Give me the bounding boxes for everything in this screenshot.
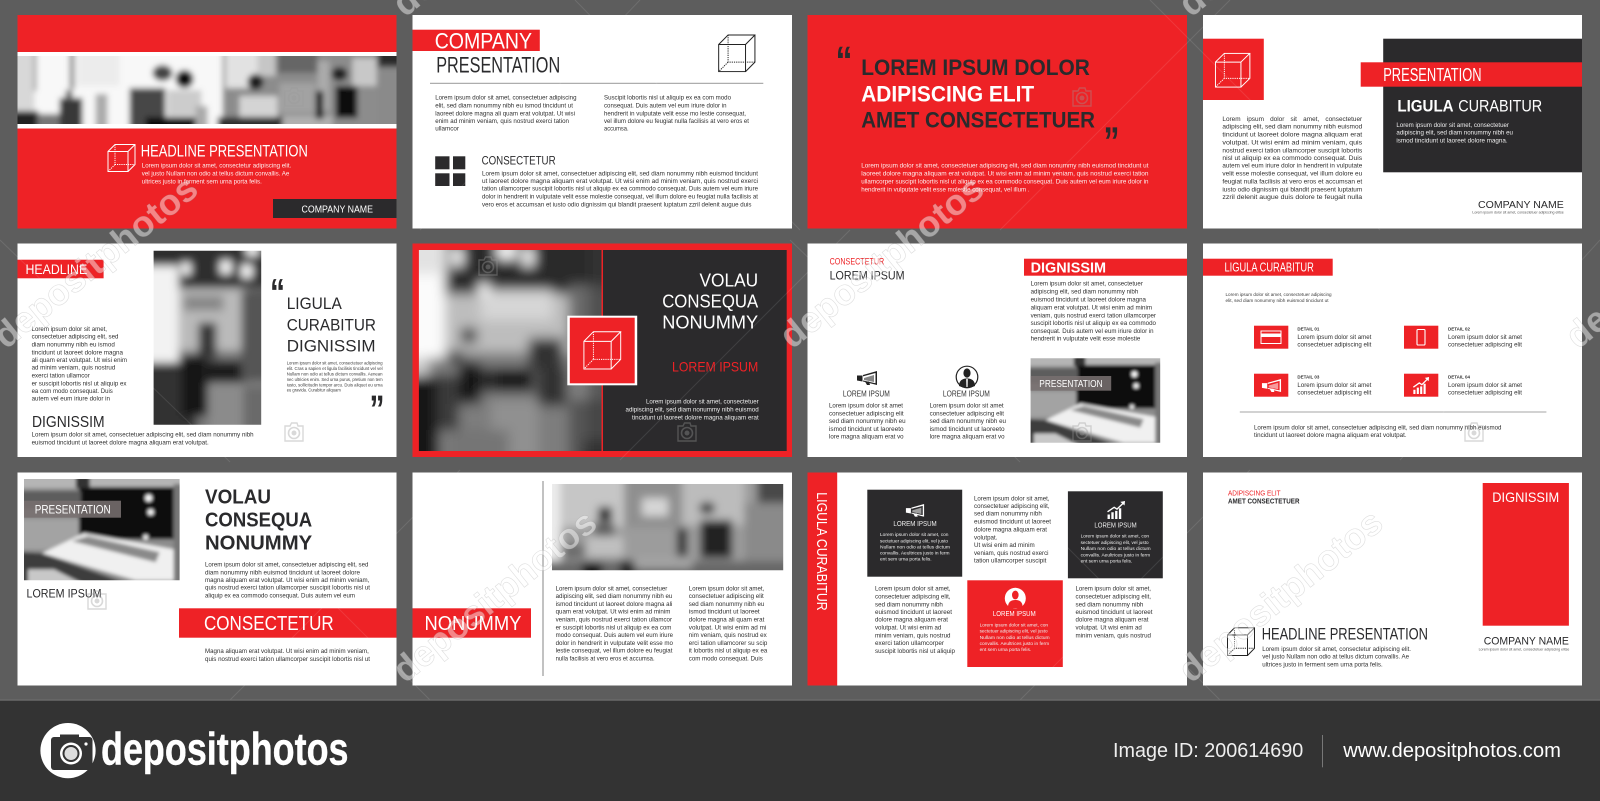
text block bottom: tation ullamcorper suscipit lobortis nisl ut aliquip ex ea commodo consequat. Duis autem vel eum iriure [482, 186, 758, 193]
text block left [435, 95, 577, 133]
heading pair [830, 257, 905, 283]
red heading bar [179, 608, 396, 638]
text block left: autem vel eum iriure dolor in hendrerit in vulputate [1222, 163, 1363, 170]
text block bottom: vero eros et accumsan et iusto odio dignissim qui blandit praesent luptatum zzril delenit augue duis [482, 201, 752, 208]
text block bottom [205, 648, 370, 663]
heading: HEADLINE PRESENTATION [141, 142, 308, 161]
text block [1031, 281, 1157, 343]
red card: convallis. Aeultrices justo in ferm [980, 641, 1049, 647]
feature column 2: consectetuer adipiscing elit [930, 410, 1004, 417]
text block: magna aliquam erat volutpat. Ut wisi enim ad minim veniam, [205, 577, 370, 584]
text block left: adipiscing elit, sed diam nonummy nibh euismod [1222, 124, 1363, 131]
dark block [1383, 39, 1582, 172]
heading: NONUMMY [205, 532, 313, 554]
red banner [1361, 62, 1582, 87]
quote heading: LIGULA [287, 294, 342, 313]
detail 02: Lorem ipsum dolor sit amet [1448, 334, 1522, 341]
text block middle: consectetuer adipiscing elit, [974, 503, 1050, 510]
text block left: ullamcor [435, 126, 460, 133]
panel: slide 12 closing [1203, 472, 1582, 686]
red heading bar: LIGULA CURABITUR [1224, 261, 1314, 275]
text column 2: Lorem ipsum dolor sit amet, [689, 585, 764, 592]
red cube tile [567, 316, 637, 385]
text block bottom [482, 170, 759, 208]
detail 03: Lorem ipsum dolor sit amet [1297, 382, 1372, 389]
photo: bath with label: PRESENTATION [35, 503, 111, 517]
detail 01 [1254, 326, 1372, 349]
red card: Lorem ipsum dolor sit amet, con [980, 622, 1048, 628]
text column 1 [556, 585, 673, 663]
red heading bar [412, 608, 531, 638]
red heading bar: CONSECTETUR [204, 613, 334, 635]
text column 1: ismod tincidunt ut laoreet dolore magna ali [556, 601, 673, 608]
text column 1: er suscipit lobortis nisl ut aliquip ex ea com [556, 624, 672, 631]
text column 2: erci tation ullamcorer su scip [689, 640, 768, 647]
small intro text [1226, 292, 1332, 303]
text block left: feugiat nulla facilisis at vero eros et accumsan et [1222, 178, 1362, 185]
quote line 3: AMET CONSECTETUER [861, 107, 1095, 132]
text block on dark: adipiscing elit, sed diam nonummy nibh eu [1396, 130, 1513, 137]
open quote mark: “ [270, 272, 285, 314]
feature column 1: ismod tincidunt ut laoreeto [829, 426, 904, 433]
text block middle: dolore magna aliquam erat [974, 526, 1047, 533]
text block bottom: tincidunt ut laoreet dolore magna aliquam erat volutpat. [1254, 432, 1407, 439]
dark panel [603, 250, 787, 451]
text block right: Suscipit lobortis nisl ut aliquip ex ea com modo [604, 95, 731, 102]
feature column 1: LOREM IPSUM [843, 390, 890, 399]
text block: ultrices justo in ferment sem urna porta felis. [142, 178, 262, 185]
heading: ligula curabitur: CURABITUR [1458, 97, 1542, 116]
text block: vel justo Nullam non odio at tellus dictum convallis. Ae [142, 171, 290, 178]
panel: slide 4 presentation [1203, 15, 1582, 228]
heading pair: CONSECTETUR [830, 257, 885, 267]
company name: Lorem ipsum dolor sit amet, consectetuer adipiscing elitse [1479, 647, 1569, 651]
quote heading: DIGNISSIM [287, 337, 376, 356]
text block lower left: consectetuer adipiscing elit, [875, 593, 951, 600]
text column 2: dolore magna ali quam erat [689, 617, 764, 624]
text block: laoreet dolore magna aliquam erat volutpat. Ut wisi enim ad minim veniam, quis nostrud exerci tation [861, 171, 1149, 178]
panel: slide 7 dignissim [808, 244, 1187, 467]
red card [967, 580, 1063, 667]
detail 01: Lorem ipsum dolor sit amet [1297, 334, 1372, 341]
text column 2: consectetuer adipiscing elit [689, 593, 764, 600]
feature column 1: consectetuer adipiscing elit [829, 410, 904, 417]
icon: four squares [435, 156, 465, 186]
text block bottom [1254, 424, 1502, 439]
red sub-heading: LOREM IPSUM [672, 358, 758, 374]
text column 1: Lorem ipsum dolor sit amet, consectetuer [556, 585, 668, 592]
text column 2: com modo consequat. Duis [689, 656, 763, 663]
feature column 2 [930, 390, 1006, 441]
panel: slide 11 cards [808, 472, 1187, 686]
logo: camera badge [40, 723, 96, 778]
red card: Nullam non odio at tellus dictum [980, 635, 1050, 641]
panel: slide 8 details [1203, 244, 1582, 457]
text block right [604, 95, 749, 133]
text block on dark: ismod tincidunt ut laoreet dolore magna. [1396, 138, 1508, 145]
text block left: zzril delenit augue duis dolore te feugait nulla [1222, 194, 1363, 201]
panel: slide 6 framed photo [374, 205, 792, 506]
text block middle: volutpat. [974, 534, 998, 541]
company name tag [273, 199, 396, 218]
text column 2: nim veniam, quis nostrud ex [689, 632, 767, 639]
heading: VOLAU [700, 270, 758, 291]
text block middle [974, 495, 1051, 565]
text block lower left: euismod tincidunt ut laoreet [875, 609, 952, 616]
photo: blurred office [552, 484, 784, 570]
detail 01: consectetuer adipiscing elit [1297, 342, 1372, 349]
text block lower left: sed diam nonummy nibh [875, 601, 943, 608]
text block: suscipit lobortis nisl ut aliquip ex ea commodo [1031, 320, 1156, 327]
text block: quis nostrud exerci tation ullamcorper suscipit lobortis nisl ut [205, 585, 370, 592]
feature column 2: Lorem ipsum dolor sit amet [930, 403, 1004, 410]
red block: DIGNISSIM [1492, 489, 1559, 505]
text block left: diam nonummy nibh eu ismod [32, 342, 115, 349]
text block: tincidunt ut laoreet dolore magna aliquam erat [632, 414, 759, 421]
text block: aliquam erat volutpat. Ut wisi enim ad minim [1031, 304, 1152, 311]
text column 2: ismod tincidunt ut laoreet [689, 609, 760, 616]
website url: www.depositphotos.com [1342, 740, 1561, 762]
detail 04 [1404, 374, 1522, 397]
detail 02 [1404, 326, 1522, 349]
photo: bath with label [1014, 342, 1180, 467]
heading [205, 486, 313, 554]
text block right: accumsa. [604, 126, 629, 133]
text block lower left: Lorem ipsum dolor sit amet, [875, 586, 951, 593]
detail 03: DETAIL 03 [1297, 374, 1320, 379]
text column 2 [689, 585, 768, 663]
text block: hendrerit in vulputate velit esse molestie [1031, 336, 1141, 343]
feature column 1: Lorem ipsum dolor sit amet [829, 403, 903, 410]
red heading bar [1024, 259, 1187, 276]
text block: Lorem ipsum dolor sit amet, consectetuer [646, 399, 759, 406]
small quote text: Nullam non odio at tellus dictum convallis. Aenean [287, 372, 383, 377]
vertical heading: LIGULA CURABITUR [813, 492, 829, 611]
text block right: consequat. Duis autem vel eum iriure dolor in [604, 102, 727, 109]
close quote mark: ” [1104, 120, 1120, 164]
text block left: elit, sed diam nonummy nibh eu ismod tincidunt ut [435, 102, 573, 109]
text block right: hendrerit in vulputate velit esse mo lestie consequat, [604, 110, 746, 117]
small quote text: Lorem ipsum dolor sit amet, consectetuer adipiscing [287, 361, 383, 366]
text block: hendrerit in vulputate velit esse molestie consequat, vel illum . [861, 186, 1030, 193]
quote line 2: ADIPISCING ELIT [861, 81, 1035, 106]
text block lower right: volutpat. Ut wisi enim ad [1076, 625, 1142, 632]
panel: slide 5 headline and quote [18, 216, 396, 466]
top labels: AMET CONSECTETUER [1228, 497, 1300, 506]
heading pair: LOREM IPSUM [830, 269, 905, 283]
dark card 1: Nullam non odio at tellus dictum [880, 544, 950, 550]
text block middle: sed diam nonummy nibh [974, 511, 1042, 518]
text column 1: veniam, quis nostrud exerci tation ullamcor [556, 617, 673, 624]
text block middle: tation ullamcorper suscipit [974, 558, 1047, 565]
text column 2: sed diam nonummy nibh eu [689, 601, 765, 608]
detail 01: DETAIL 01 [1297, 327, 1320, 332]
dark card 2: sectetuer adipiscing elit, vel justo [1081, 540, 1149, 546]
heading: ligula curabitur: LIGULA [1397, 97, 1454, 116]
text block bottom: ut laoreet dolore magna aliquam erat volutpat. Ut wisi enim ad minim veniam, quis nostrud exerci [482, 178, 759, 185]
icon: black cube [1228, 628, 1254, 655]
feature column 2: sed diam nonummy nibh eu [930, 418, 1006, 425]
photo: blurred lobby [418, 250, 602, 451]
top labels [1228, 489, 1300, 506]
icon: megaphone [857, 371, 877, 385]
caption: LOREM IPSUM [26, 586, 102, 600]
quote heading: CURABITUR [287, 315, 376, 334]
text block lower left: volutpat. Ut wisi enim ad [875, 625, 942, 632]
small intro text: elit, sed diam nonummy nibh euismod tincidunt ut [1226, 298, 1329, 303]
text block: ullamcorper suscipit lobortis nisl ut aliquip ex ea commodo consequat. Duis autem vel eum iriure dolor in [861, 178, 1149, 185]
text block lower left: suscipit lobortis nisl ut aliquip [875, 648, 955, 655]
text block bottom: quis nostrud exerci tation ullamcorper suscipit lobortis nisl ut [205, 656, 370, 663]
heading: VOLAU [205, 486, 271, 508]
watermark overlay: depositphotos [771, 167, 991, 356]
photo: lobby portrait [154, 250, 262, 425]
text block lower left: minim veniam, quis nostrud [875, 632, 951, 639]
company name: Lorem ipsum dolor sit amet, consectetuer adipiscing elitse [1472, 211, 1564, 215]
watermark overlay: depositphotos [384, 501, 604, 690]
small quote text: eu gravida. Curabitur aliquam [287, 387, 341, 392]
text block lower left: exerci tation ullamcorper [875, 640, 945, 647]
icon: person [956, 366, 978, 388]
company name: COMPANY NAME [1478, 199, 1564, 211]
heading: CONSEQUA [662, 291, 759, 312]
detail 04: consectetuer adipiscing elit [1448, 390, 1522, 397]
red heading bar [1203, 259, 1333, 276]
text block bottom: dolor in hendrerit in vulputate velit esse molestie consequat, vel illum dolore eu feugiat nulla facilisis at [482, 194, 758, 201]
text block lower right: euismod tincidunt ut laoreet [1076, 609, 1153, 616]
red headline tag: HEADLINE [26, 261, 87, 277]
detail 04: DETAIL 04 [1448, 374, 1470, 379]
text block left [1222, 116, 1363, 201]
text block bottom: Lorem ipsum dolor sit amet, consectetuer adipiscing elit, sed diam nonummy nibh [32, 431, 254, 438]
text block: adipiscing elit, sed diam nonummy nibh euismod [626, 407, 759, 414]
heading: presentation: PRESENTATION [436, 53, 560, 78]
text block [205, 561, 370, 599]
dark card 2: convallis. Aeultrices justo in ferm [1081, 552, 1150, 558]
text block: Lorem ipsum dolor sit amet, consectetur adipiscing elit. [142, 163, 291, 170]
red card: LOREM IPSUM [993, 609, 1036, 618]
quote line 1: LOREM IPSUM DOLOR [861, 55, 1090, 80]
logo: wordmark: depositphotos [101, 723, 348, 774]
heading: ligula curabitur [1397, 97, 1542, 116]
image id: Image ID: 200614690 [1113, 740, 1303, 762]
feature column 1: sed diam nonummy nibh eu [829, 418, 906, 425]
text column 1: adipiscing elit, sed diam nonummy nibh eu [556, 593, 673, 600]
photo: bath with label [4, 459, 204, 609]
sub-heading: CONSECTETUR [482, 154, 556, 168]
red card: ent sem urna porta felis. [980, 647, 1031, 653]
small quote text [287, 361, 383, 392]
text block: ultrices justo in ferment sem urna porta felis. [1262, 661, 1383, 668]
text column 1: quam erat volutpat. Ut wisi enim ad minim [556, 609, 671, 616]
dark card 2 [1068, 491, 1163, 578]
text block bottom [32, 431, 254, 446]
text block: Lorem ipsum dolor sit amet, consectetuer adipiscing elit, sed [205, 561, 369, 568]
dark card 2: Lorem ipsum dolor sit amet, con [1081, 534, 1149, 540]
detail 03 [1254, 374, 1372, 397]
text block left: consectetuer adipiscing elit, sed [32, 334, 119, 341]
dark card 2: ent sem urna porta felis. [1081, 558, 1132, 564]
text block bottom: Magna aliquam erat volutpat. Ut wisi enim ad minim veniam, [205, 648, 369, 655]
panel: slide 9 volau [4, 459, 397, 686]
text block lower right: sed diam nonummy nibh [1076, 601, 1144, 608]
dark card 1 [867, 490, 962, 577]
red headline tag [18, 260, 104, 278]
red heading bar: DIGNISSIM [1031, 259, 1106, 276]
watermark overlay: depositphotos [1170, 501, 1390, 690]
text block left: tincidunt ut laoreet dolore magna [32, 349, 123, 356]
text block left: laoreet dolore magna ali quam erat volutpat. Ut wisi [435, 110, 575, 117]
text block lower right [1076, 586, 1153, 639]
text block lower left: dolore magna aliquam erat [875, 617, 948, 624]
panel: slide 1 headline cover [0, 15, 432, 228]
text column 1: dolor in hendrerit in vulputate velit esse mo [556, 640, 673, 647]
heading: HEADLINE PRESENTATION [1262, 625, 1428, 644]
text block left: ali quam erat volutpat. Ut wisi enim [32, 357, 127, 364]
text block: consequat. Duis autem vel eum iriure dolor in [1031, 328, 1154, 335]
dark card 1: sectetuer adipiscing elit, vel justo [880, 538, 948, 544]
text block left: iusto odio dignissim qui blandit praesent luptatum [1222, 186, 1363, 193]
text block middle: veniam, quis nostrud exerci [974, 550, 1049, 557]
photo: bath with label: PRESENTATION [1039, 378, 1103, 390]
text block [1262, 646, 1411, 668]
text block [142, 163, 291, 185]
feature column 2: LOREM IPSUM [943, 390, 990, 399]
close quote mark: ” [370, 389, 384, 431]
text column 1: modo consequat. Duis autem vel eum iriure [556, 632, 673, 639]
text block bottom: euismod tincidunt ut laoreet dolore magna aliquam erat volutpat. [32, 439, 209, 446]
panel: slide 10 nonummy [412, 454, 822, 686]
panel: slide 3 quote [808, 15, 1187, 228]
text column 2: volutpat. Ut wisi enim ad mi [689, 624, 767, 631]
text block left: nostrud exerci tation ullamcorper suscipit lobortis [1222, 147, 1363, 154]
text block middle: Ut wisi enim ad minim [974, 542, 1035, 549]
detail 04: Lorem ipsum dolor sit amet [1448, 382, 1522, 389]
text column 1: lestie consequat, vel illum dolore eu feugiat [556, 648, 673, 655]
photo: office people [18, 56, 396, 124]
dark card 1: convallis. Aeultrices justo in ferm [880, 551, 950, 557]
dark card 2: Nullam non odio at tellus dictum [1081, 546, 1151, 552]
red heading bar: NONUMMY [424, 613, 521, 635]
text block left: ea com modo consequat. Duis [32, 388, 113, 395]
text block bottom: Lorem ipsum dolor sit amet, consectetuer adipiscing elit, sed diam nonummy nibh euismod tincidunt [482, 170, 758, 177]
text block left: er suscipit lobortis nisl ut aliquip ex [32, 380, 127, 387]
company name tag: COMPANY NAME [302, 204, 373, 215]
icon: black cube [719, 35, 755, 72]
text block lower right: dolore magna aliquam erat [1076, 617, 1149, 624]
dark card 1: LOREM IPSUM [893, 519, 937, 528]
text block left: nisl ut aliquip ex ea commodo consequat. Duis [1222, 155, 1363, 162]
text block: Lorem ipsum dolor sit amet, consectetur adipiscing elit. [1262, 646, 1411, 653]
sub-heading: DIGNISSIM [32, 414, 105, 431]
text block: veniam, quis nostrud exerci tation ullamcorper [1031, 312, 1157, 319]
text block right: vel illum dolore eu feugiat nulla facilisis at vero eros et [604, 118, 749, 125]
text block [626, 399, 759, 421]
text block [861, 163, 1149, 193]
panel: slide 2 company presentation [412, 15, 792, 228]
text block: vel justo Nullam non odio at tellus dictum convallis. Ae [1262, 654, 1409, 661]
quote heading [287, 294, 376, 356]
detail 02: DETAIL 02 [1448, 327, 1470, 332]
heading: CONSEQUA [205, 509, 312, 531]
text block left: Lorem ipsum dolor sit amet, consectetuer adipiscing [435, 95, 577, 102]
heading: NONUMMY [662, 312, 758, 333]
icon: white cube [108, 144, 135, 172]
text block lower right: Lorem ipsum dolor sit amet, [1076, 586, 1151, 593]
open quote mark: “ [836, 39, 852, 83]
detail 03: consectetuer adipiscing elit [1297, 390, 1372, 397]
heading [662, 270, 759, 333]
text block left: enim ad minim veniam, quis nostrud exerci tation [435, 118, 569, 125]
text block: aliquip ex ea commodo consequat. Duis autem vel eum [205, 592, 355, 599]
red icon block [1203, 39, 1264, 100]
heading: company: COMPANY [435, 28, 532, 53]
dark card 1: ent sem urna porta felis. [880, 557, 932, 563]
text column 2: it lobortis nisl ut aliquip ex ea [689, 648, 768, 655]
text block left: autem vel eum iriure dolor in [32, 396, 110, 403]
feature column 2: ismod tincidunt ut laoreeto [930, 426, 1005, 433]
red banner: PRESENTATION [1383, 65, 1482, 85]
small intro text: Lorem ipsum dolor sit amet, consectetuer adipiscing [1226, 292, 1332, 297]
text block left: Lorem ipsum dolor sit amet, consectetuer [1222, 116, 1363, 123]
feature column 2: lore magna aliquam erat vo [930, 434, 1005, 441]
company name: COMPANY NAME [1484, 636, 1569, 648]
red card: sectetuer adipiscing elit, vel justo [980, 629, 1048, 635]
text block: adipiscing elit, sed diam nonummy nibh [1031, 289, 1139, 296]
dark card 2: LOREM IPSUM [1094, 521, 1137, 530]
dark card 1: Lorem ipsum dolor sit amet, con [880, 532, 949, 538]
small quote text: elit. Cras a sapien et ligula facilisis tincidunt vel vel [287, 366, 383, 371]
small quote text: iusto, sollicitudin tempor arcu. Duis aliquet eu urna [287, 382, 383, 387]
feature column 1: lore magna aliquam erat vo [829, 434, 904, 441]
detail 02: consectetuer adipiscing elit [1448, 342, 1522, 349]
small quote text: nec ultricies enim. Sed urna purus, pretium non tem [287, 377, 383, 382]
feature column 1 [829, 390, 906, 441]
text block lower right: minim veniam, quis nostrud [1076, 632, 1151, 639]
text block lower right: consectetuer adipiscing elit, [1076, 593, 1151, 600]
footer band [0, 700, 1600, 801]
text block left: tincidunt ut laoreet dolore magna aliquam erat [1222, 132, 1362, 139]
text block middle: euismod tincidunt ut laoreet [974, 519, 1051, 526]
text block left: ad minim veniam, quis nostrud [32, 365, 116, 372]
text block: Lorem ipsum dolor sit amet, consectetuer adipiscing elit, sed diam nonummy nibh euismod tincidunt ut [861, 163, 1149, 170]
text block on dark: Lorem ipsum dolor sit amet, consectetuer [1396, 122, 1510, 129]
text block lower left [875, 586, 955, 655]
text block bottom: Lorem ipsum dolor sit amet, consectetuer adipiscing elit, sed diam nonummy nibh euismod [1254, 424, 1502, 431]
top labels: ADIPISCING ELIT [1228, 489, 1281, 498]
text block: diam nonummy nibh euismod tincidunt ut laoreet dolore [205, 569, 360, 576]
text block on dark [1396, 122, 1513, 145]
text block middle: Lorem ipsum dolor sit amet, [974, 495, 1050, 502]
text block left: volutpat. Ut wisi enim ad minim veniam, quis [1222, 139, 1363, 146]
text column 1: nulla facilisis at vero eros et accumsa. [556, 656, 655, 663]
text block: Lorem ipsum dolor sit amet, consectetuer [1031, 281, 1144, 288]
text block: euismod tincidunt ut laoreet dolore magna [1031, 297, 1146, 304]
text block left: velit esse molestie consequat, vel illum dolore eu [1222, 171, 1363, 178]
text block left: Lorem ipsum dolor sit amet, [32, 326, 107, 333]
text block left [32, 326, 127, 403]
red block [1483, 483, 1569, 626]
text block left: exerci tation ullamcor [32, 373, 91, 380]
